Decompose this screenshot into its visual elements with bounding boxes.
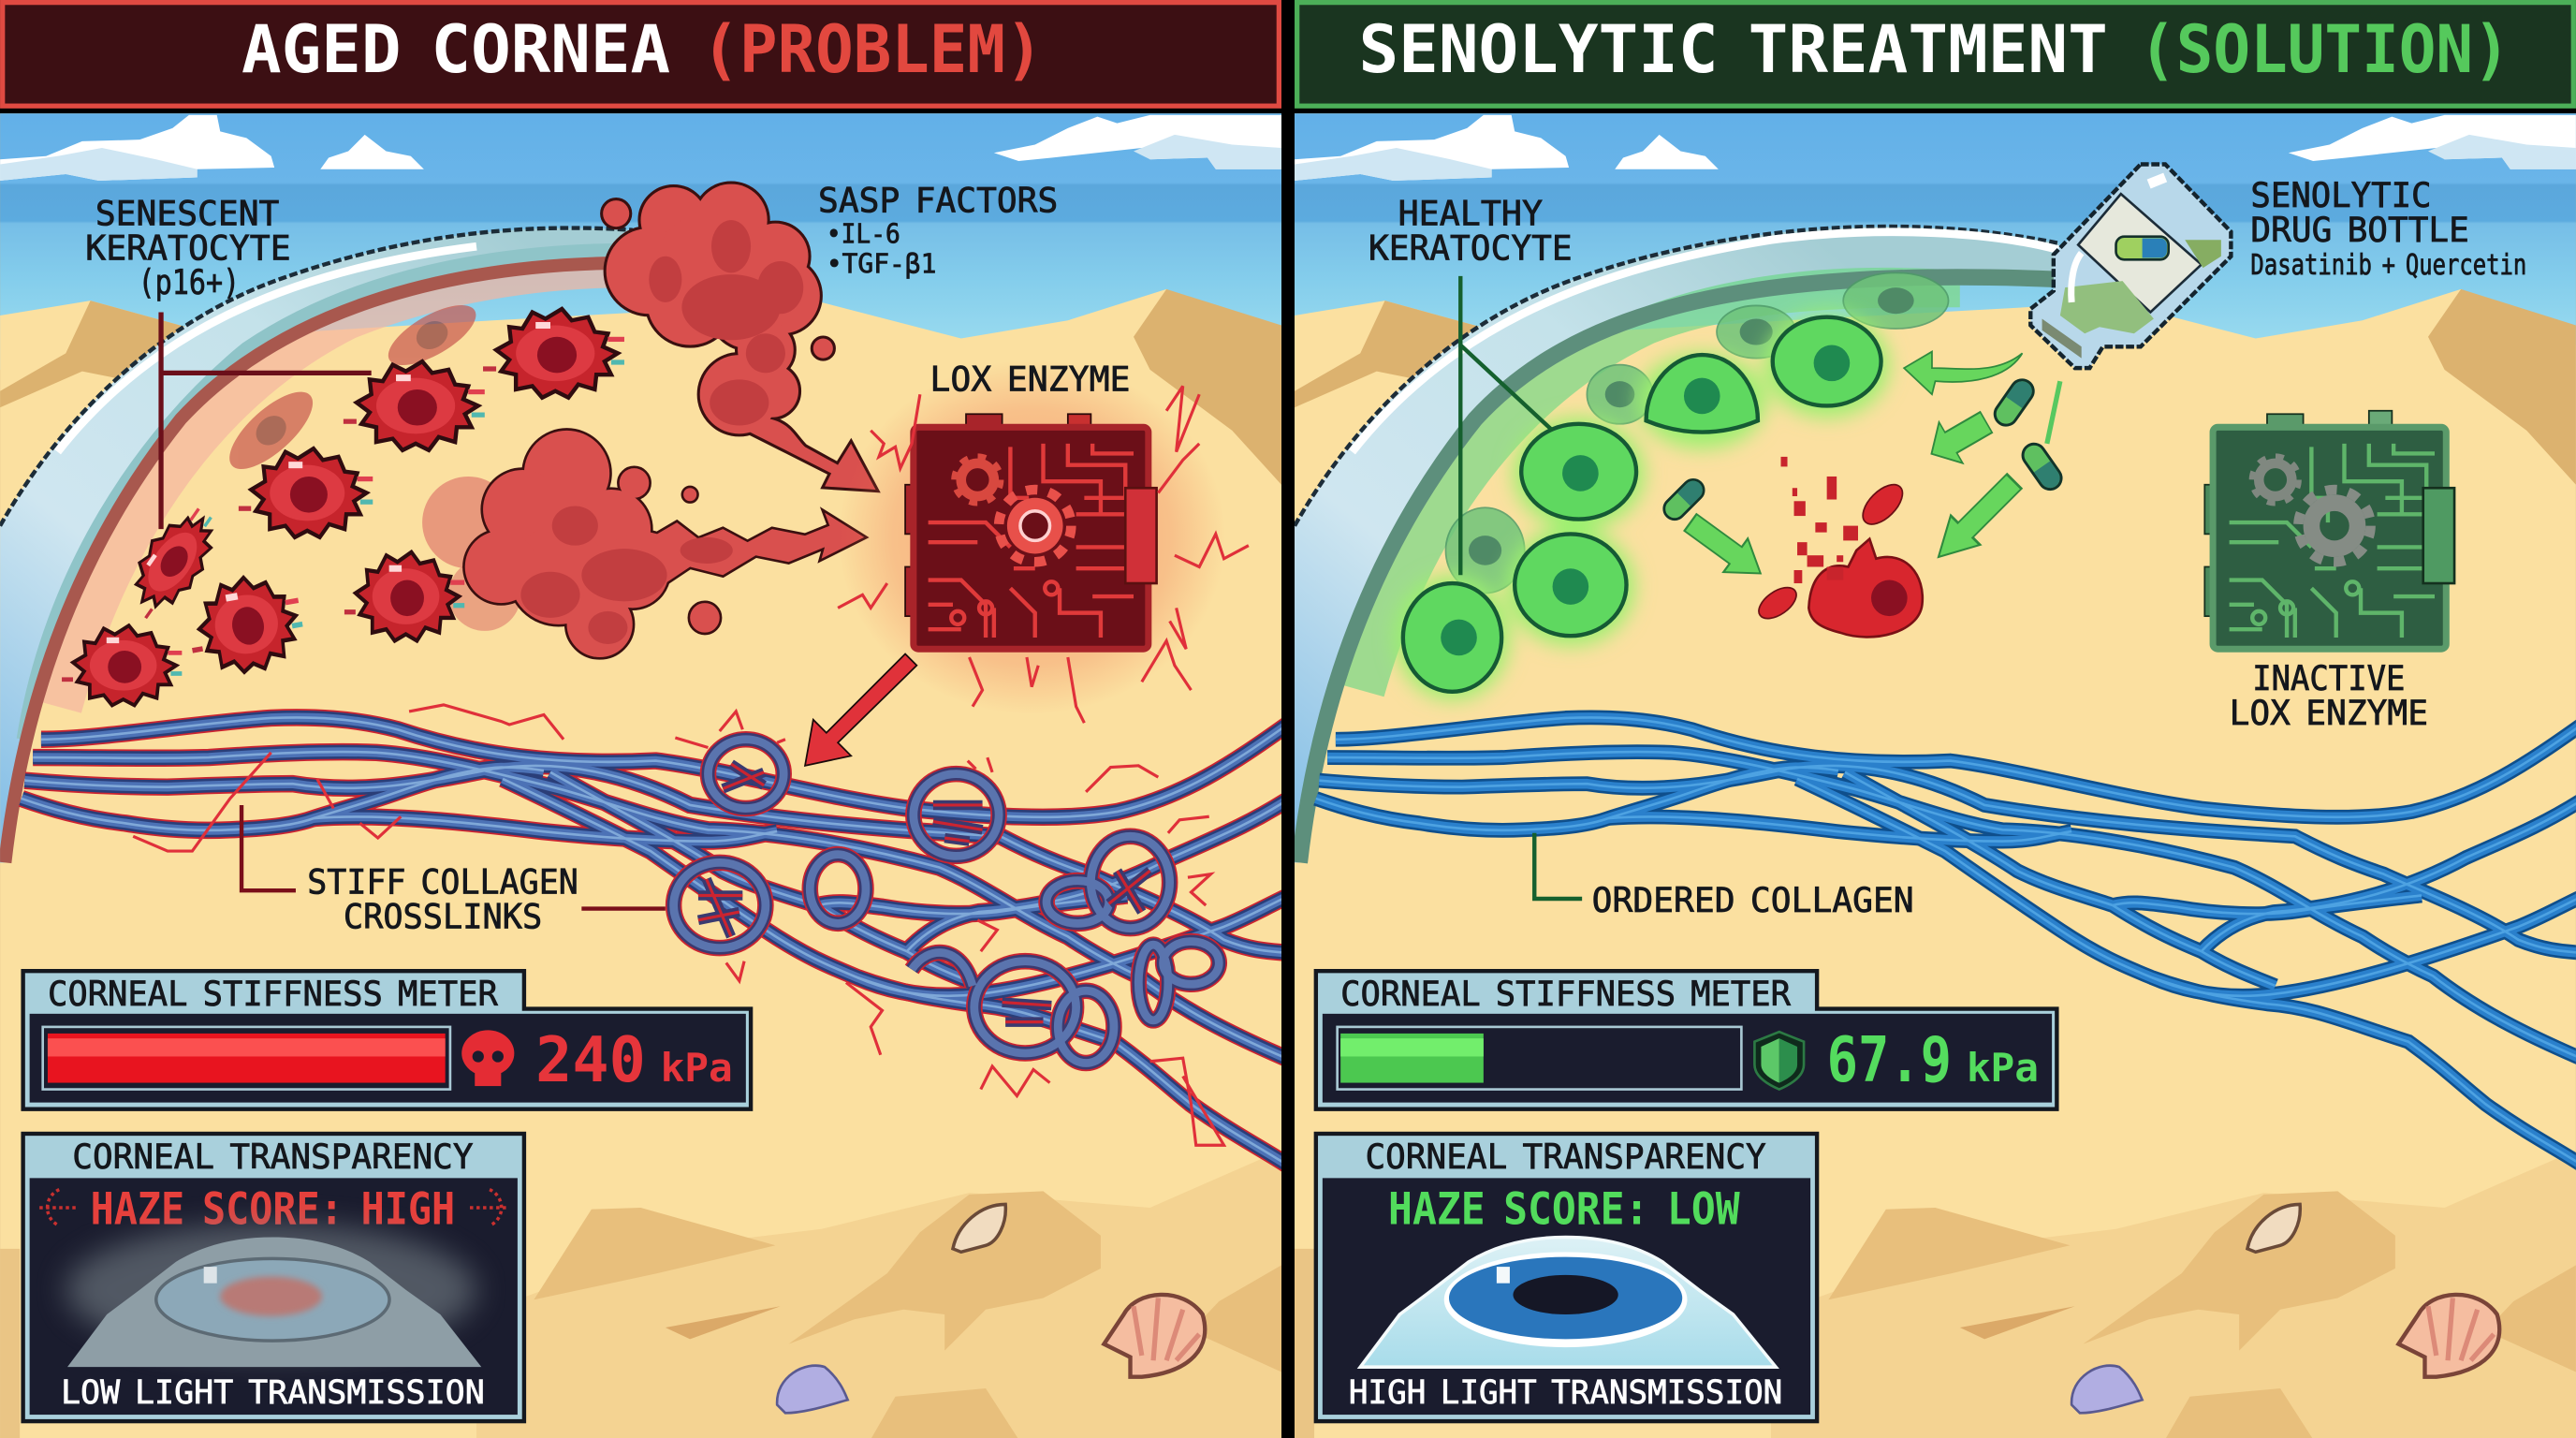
- label: SASP factors: •IL-6: [827, 219, 900, 250]
- stiffness meter: high: kPa: [661, 1045, 733, 1091]
- SASP cloud upper: [603, 184, 875, 490]
- label: SASP factors: SASP FACTORS: [818, 180, 1058, 220]
- icon: skull: [461, 1030, 514, 1086]
- label: senescent keratocyte: (p16+): [138, 262, 240, 302]
- header banner: senolytic treatment: (SOLUTION): [2139, 11, 2510, 88]
- icon: drug bottle: [2030, 165, 2231, 368]
- stiffness meter: low: kPa: [1967, 1045, 2039, 1091]
- icon: shield: [1754, 1032, 1804, 1090]
- label: stiff collagen crosslinks: [242, 805, 666, 937]
- transparency panel: high haze: [23, 1134, 524, 1421]
- bar: stiffness full: [43, 1027, 450, 1090]
- label: inactive LOX enzyme: [2230, 658, 2428, 733]
- beach scene: left: [0, 113, 1290, 1438]
- bar: stiffness partial: [1338, 1027, 1741, 1090]
- header banner: aged cornea: [3, 3, 1279, 106]
- label: inactive LOX enzyme: INACTIVE: [2252, 658, 2405, 698]
- icon: warning sparks: [39, 1190, 506, 1225]
- cornea dome: [0, 228, 633, 862]
- label: senescent keratocyte: KERATOCYTE: [85, 227, 291, 268]
- label: LOX enzyme: LOX ENZYME: [929, 360, 1131, 400]
- label: stiff collagen crosslinks: STIFF COLLAGEN: [307, 862, 578, 902]
- label: senolytic drug bottle: DRUG BOTTLE: [2250, 210, 2469, 250]
- label: senolytic drug bottle: SENOLYTIC: [2250, 175, 2431, 215]
- label: SASP factors: [818, 180, 1058, 279]
- transparency panel: low haze: [1316, 1134, 1817, 1421]
- transparency panel: high haze: LOW LIGHT TRANSMISSION: [61, 1373, 485, 1412]
- transparency panel: low haze: HAZE SCORE: LOW: [1388, 1183, 1740, 1235]
- dying senescent cell: [1753, 457, 1923, 637]
- healthy keratocytes: [1395, 272, 1949, 700]
- icon: hazy eye: [66, 1224, 481, 1367]
- shells: [777, 1204, 1205, 1413]
- collagen fibers ordered: [1316, 717, 2576, 1167]
- panel: senolytic treatment solution: [1295, 3, 2576, 1438]
- collagen fibers crosslinked: [22, 705, 1290, 1167]
- stiffness meter: low: CORNEAL STIFFNESS METER: [1340, 974, 1792, 1014]
- SASP cloud lower: [422, 431, 864, 657]
- label: ordered collagen: [1534, 833, 1914, 920]
- stiffness meter: high: [23, 971, 751, 1109]
- label: ordered collagen: ORDERED COLLAGEN: [1592, 880, 1914, 920]
- header banner: aged cornea: (PROBLEM): [701, 11, 1044, 88]
- capsules falling: [1660, 375, 2066, 523]
- stiffness meter: low: 67.9: [1827, 1023, 1952, 1096]
- label: senescent keratocyte: SENESCENT: [95, 193, 279, 233]
- transparency panel: high haze: HAZE SCORE: HIGH: [91, 1183, 455, 1235]
- LOX enzyme active: [838, 360, 1225, 714]
- stiffness meter: high: CORNEAL STIFFNESS METER: [48, 974, 499, 1014]
- label: healthy keratocyte: HEALTHY: [1398, 193, 1543, 233]
- panel: aged cornea problem: [0, 3, 1290, 1438]
- capsule in bottle: [2116, 237, 2169, 259]
- header banner: aged cornea: AGED CORNEA: [242, 11, 670, 88]
- transparency panel: high haze: CORNEAL TRANSPARENCY: [72, 1137, 474, 1177]
- header banner: senolytic treatment: SENOLYTIC TREATMENT: [1358, 11, 2108, 88]
- icon: clear eye: [1360, 1238, 1776, 1367]
- LOX enzyme inactive: [2204, 411, 2454, 649]
- lightning sparks around LOX: [838, 386, 1249, 723]
- label: senolytic drug bottle: [2250, 175, 2526, 282]
- cornea dome: [1295, 227, 2058, 862]
- stiffness meter: high: 240: [535, 1023, 646, 1096]
- shells: [2071, 1204, 2499, 1413]
- beach scene: right: [1295, 113, 2576, 1438]
- stiffness meter: low: [1316, 971, 2056, 1109]
- arrows: drug action: [1678, 352, 2028, 590]
- label: healthy keratocyte: KERATOCYTE: [1368, 227, 1573, 268]
- label: stiff collagen crosslinks: CROSSLINKS: [344, 897, 542, 937]
- header banner: senolytic treatment: [1297, 3, 2573, 106]
- transparency panel: low haze: HIGH LIGHT TRANSMISSION: [1349, 1373, 1782, 1412]
- label: senescent keratocyte: [85, 193, 372, 529]
- transparency panel: low haze: CORNEAL TRANSPARENCY: [1365, 1137, 1766, 1177]
- label: healthy keratocyte: [1368, 193, 1573, 575]
- label: inactive LOX enzyme: LOX ENZYME: [2230, 693, 2428, 733]
- arrow: LOX to collagen: [805, 654, 916, 766]
- senescent keratocytes: [62, 293, 624, 705]
- label: SASP factors: •TGF-β1: [827, 248, 936, 279]
